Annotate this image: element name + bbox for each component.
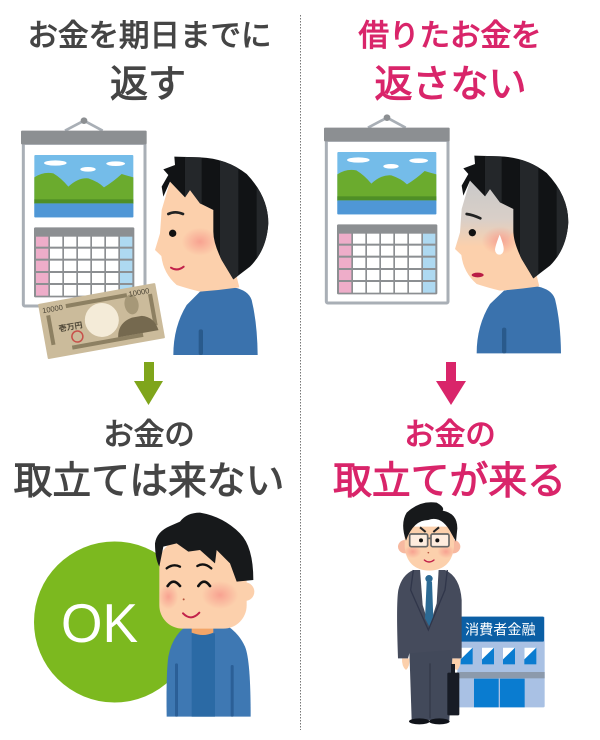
right result heading: collection comes: 取立てが来る <box>333 460 566 503</box>
icon: ten-thousand yen banknote: 壱万円 <box>58 320 83 334</box>
icon: smiling man front <box>155 513 254 717</box>
right heading: do not pay back <box>358 19 542 106</box>
right heading: do not pay back: 返さない <box>374 64 527 106</box>
left heading: pay back on time: お金を期日までに <box>28 19 272 53</box>
icon: wall calendar left <box>21 117 147 306</box>
right result heading: collection comes: お金の <box>404 418 496 452</box>
icon: worried man in profile <box>455 152 570 353</box>
arrow: pink down <box>436 362 466 405</box>
OK badge <box>34 542 195 702</box>
icon: consumer finance building: 消費者金融 <box>465 622 536 638</box>
left result heading: no collection: 取立ては来ない <box>14 460 284 503</box>
right result heading: collection comes <box>333 418 566 503</box>
right heading: do not pay back: 借りたお金を <box>358 19 542 53</box>
left result heading: no collection: お金の <box>103 418 195 452</box>
icon: businessman in suit <box>397 502 462 724</box>
left result heading: no collection <box>14 418 284 503</box>
icon: consumer finance building <box>457 617 545 707</box>
icon: ten-thousand yen banknote: 10000 <box>41 303 64 315</box>
arrow: green down <box>134 362 163 405</box>
icon: man in profile smiling <box>155 153 270 355</box>
OK badge: OK <box>61 592 138 654</box>
icon: wall calendar right <box>324 114 450 303</box>
icon: ten-thousand yen banknote <box>38 283 165 359</box>
center divider <box>300 15 302 730</box>
left heading: pay back on time: 返す <box>110 64 186 106</box>
left heading: pay back on time <box>28 19 272 106</box>
icon: ten-thousand yen banknote: 10000 <box>128 286 150 299</box>
